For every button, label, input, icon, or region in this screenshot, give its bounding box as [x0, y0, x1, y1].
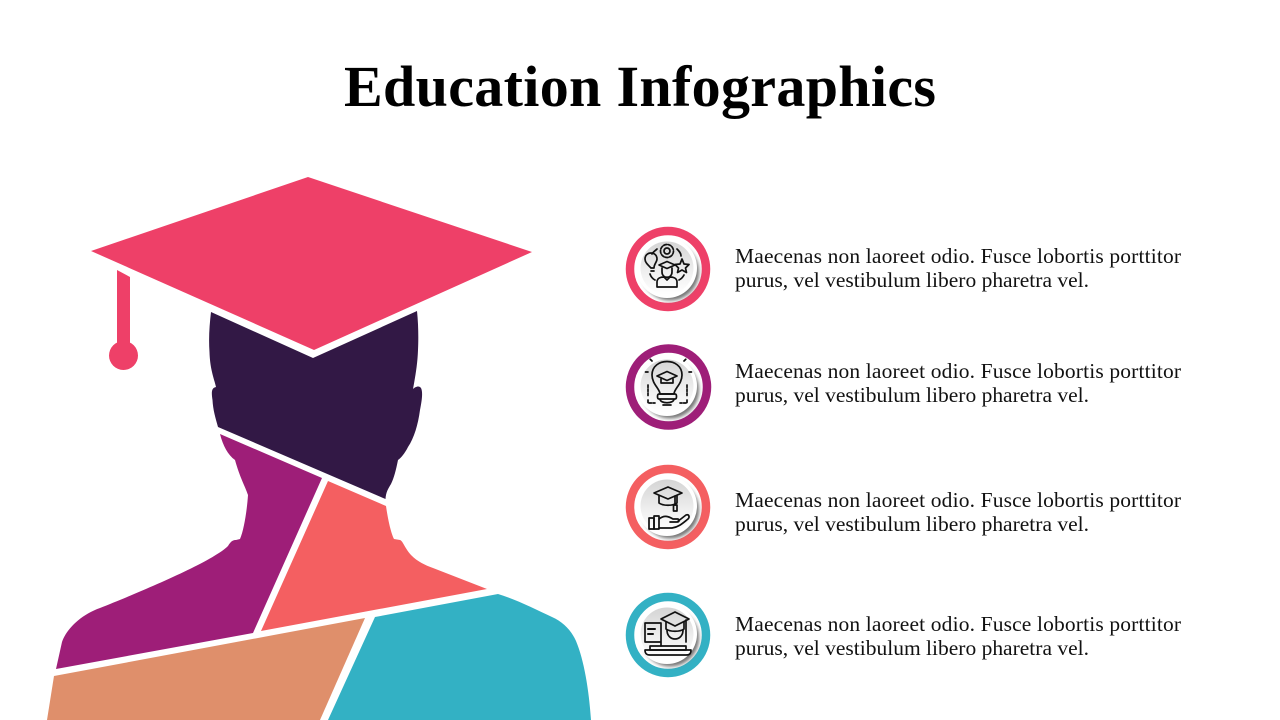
text block: Maecenas non laoreet odio. Fusce lobortis porttitor	[735, 244, 1181, 268]
icon: hand holding cap	[630, 469, 706, 545]
icon: student with ideas	[630, 231, 706, 307]
text block: purus, vel vestibulum libero pharetra vel.	[735, 636, 1089, 660]
text block: Maecenas non laoreet odio. Fusce lobortis porttitor	[735, 612, 1181, 636]
text block: purus, vel vestibulum libero pharetra vel.	[735, 512, 1089, 536]
text block: Maecenas non laoreet odio. Fusce lobortis porttitor	[735, 488, 1181, 512]
icon: laptop with cap and book	[630, 597, 706, 673]
icon: light bulb with cap	[630, 348, 707, 426]
text block	[735, 244, 1181, 292]
right neck segment	[261, 481, 487, 631]
cap tassel	[109, 270, 138, 370]
text block: Maecenas non laoreet odio. Fusce lobortis porttitor	[735, 359, 1181, 383]
item 1	[630, 231, 1181, 307]
head segment	[209, 311, 422, 499]
lower left chest segment	[47, 618, 365, 720]
text block: purus, vel vestibulum libero pharetra vel.	[735, 383, 1089, 407]
right shoulder segment	[328, 594, 591, 720]
title: Education Infographics	[344, 54, 936, 119]
item 3	[630, 469, 1181, 545]
left neck and shoulder segment	[56, 434, 322, 669]
item 4	[630, 597, 1181, 673]
text block: purus, vel vestibulum libero pharetra vel.	[735, 268, 1089, 292]
graduation cap board	[91, 177, 532, 350]
text block	[735, 359, 1181, 407]
item 2	[630, 348, 1181, 426]
graduate silhouette	[47, 177, 591, 720]
text block	[735, 612, 1181, 660]
text block	[735, 488, 1181, 536]
